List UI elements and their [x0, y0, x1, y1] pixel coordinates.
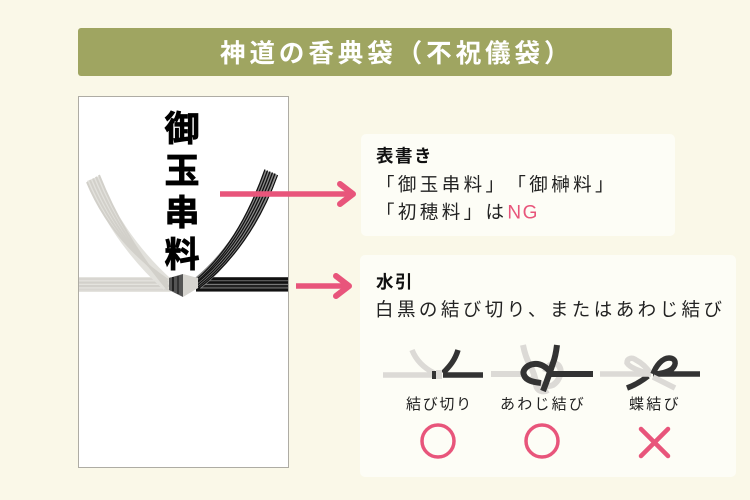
panel: inscription note: 表書き [376, 146, 433, 166]
mark: circle ok [526, 425, 558, 457]
envelope inscription: 串 [164, 194, 200, 233]
mark: cross ng [641, 429, 668, 456]
panel: mizuhiki note: 白黒の結び切り、またはあわじ結び [375, 299, 725, 320]
knot: musubikiri [383, 350, 483, 379]
knot: butterfly [600, 358, 700, 388]
label: awaji: あわじ結び [500, 396, 586, 413]
mark: circle ok [422, 425, 454, 457]
envelope inscription: 玉 [164, 152, 200, 191]
envelope inscription [164, 110, 200, 275]
envelope inscription: 御 [164, 110, 200, 149]
knot: awaji [491, 345, 593, 391]
panel: inscription note: 「御玉串料」「御榊料」 [376, 174, 617, 195]
panel: envelope [78, 96, 288, 468]
panel: inscription note [361, 134, 675, 236]
panel: inscription note: 「初穂料」はNG [376, 202, 539, 224]
arrow: cord to note [296, 276, 349, 296]
mizuhiki cord on envelope [79, 170, 288, 297]
label: musubikiri: 結び切り [406, 396, 473, 413]
label: butterfly: 蝶結び [629, 396, 681, 413]
panel: mizuhiki note: 水引 [376, 272, 414, 292]
arrow: inscription to note [220, 184, 353, 204]
title banner: 神道の香典袋（不祝儀袋） [220, 40, 573, 68]
envelope inscription: 料 [164, 236, 200, 275]
title banner [78, 28, 672, 76]
panel: mizuhiki note [360, 255, 736, 477]
